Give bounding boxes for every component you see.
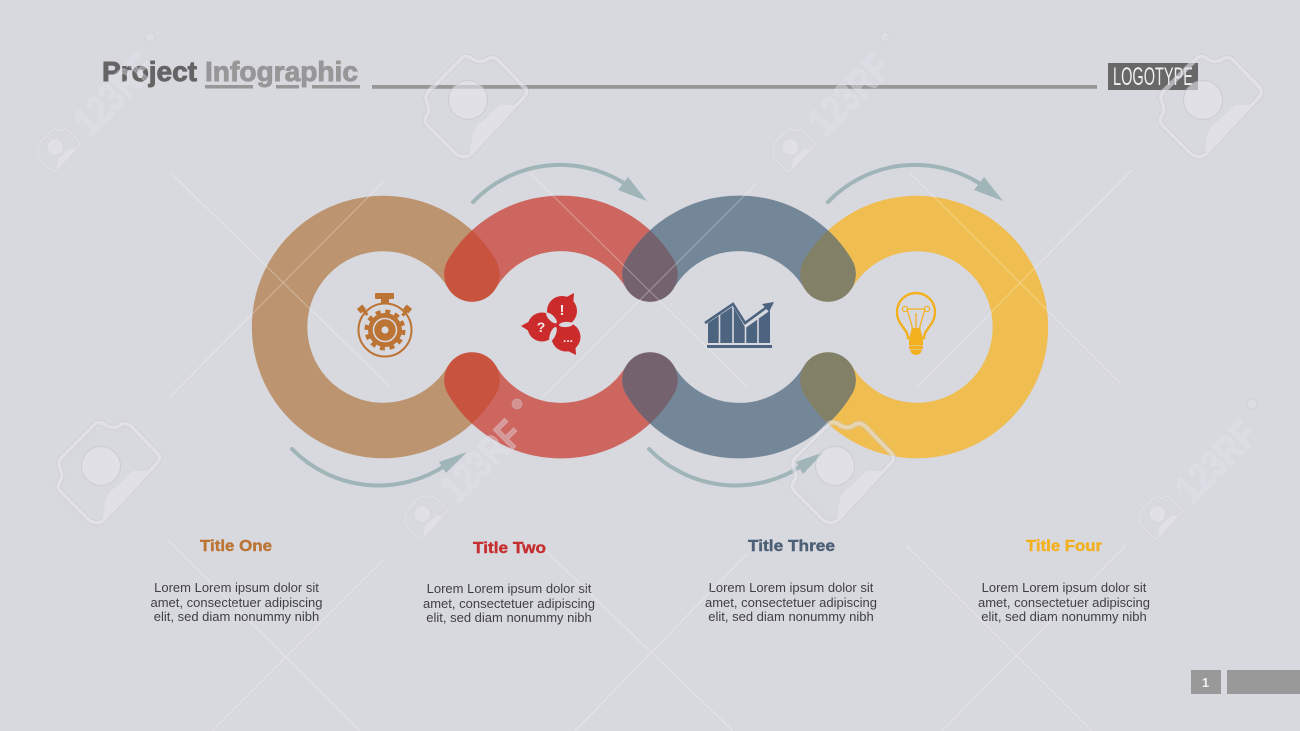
text block: title one: elit, sed diam nonummy nibh	[154, 609, 319, 624]
text block: title two: elit, sed diam nonummy nibh	[426, 610, 592, 625]
arrow: bottom one	[292, 449, 467, 486]
icon: stopwatch gear	[357, 293, 412, 356]
text block: title three: Title Three	[748, 538, 835, 555]
overlap: brown and red	[444, 230, 500, 424]
overlap: blue and yellow	[800, 230, 856, 424]
title: Project	[102, 56, 197, 87]
icon: growth chart	[705, 302, 774, 348]
text block: title three: Lorem Lorem ipsum dolor sit	[709, 580, 874, 595]
icon: speech bubbles: ...	[563, 331, 573, 345]
page number: 1	[1202, 675, 1209, 690]
icon: speech bubbles: ?	[537, 319, 545, 335]
text block: title four	[978, 538, 1150, 624]
text block: title four: elit, sed diam nonummy nibh	[981, 609, 1147, 624]
logotype	[1108, 63, 1198, 91]
arrow: bottom two	[649, 449, 824, 486]
text block: title two: Lorem Lorem ipsum dolor sit	[427, 581, 592, 596]
ring: red	[472, 223, 650, 431]
chain of rings	[280, 223, 1020, 431]
text block: title three: elit, sed diam nonummy nibh	[708, 609, 874, 624]
text block: title four: Lorem Lorem ipsum dolor sit	[982, 580, 1147, 595]
ring: brown	[280, 223, 472, 430]
text block: title one: Lorem Lorem ipsum dolor sit	[154, 580, 319, 595]
text block: title one	[151, 538, 322, 624]
text block: title two	[423, 540, 595, 625]
title	[102, 56, 360, 88]
text block: title two: amet, consectetuer adipiscing	[423, 596, 595, 611]
text block: title three	[705, 538, 877, 624]
icon: light bulb	[897, 293, 935, 355]
arrow: top one	[473, 165, 647, 202]
overlap: red and blue	[622, 230, 678, 424]
page number	[1191, 670, 1300, 694]
text block: title four: Title Four	[1026, 538, 1102, 555]
ring: yellow	[828, 224, 1020, 430]
text block: title one: Title One	[200, 538, 272, 555]
ring: blue	[650, 223, 828, 431]
logotype: LOGOTYPE	[1113, 63, 1193, 91]
text block: title three: amet, consectetuer adipiscing	[705, 595, 877, 610]
text block: title two: Title Two	[473, 540, 546, 557]
text block: title one: amet, consectetuer adipiscing	[151, 595, 322, 610]
text block: title four: amet, consectetuer adipiscing	[978, 595, 1150, 610]
icon: speech bubbles: !	[560, 302, 564, 319]
arrow: top two	[828, 165, 1003, 202]
icon: speech bubbles	[521, 293, 580, 355]
title: Infographic	[205, 56, 358, 87]
